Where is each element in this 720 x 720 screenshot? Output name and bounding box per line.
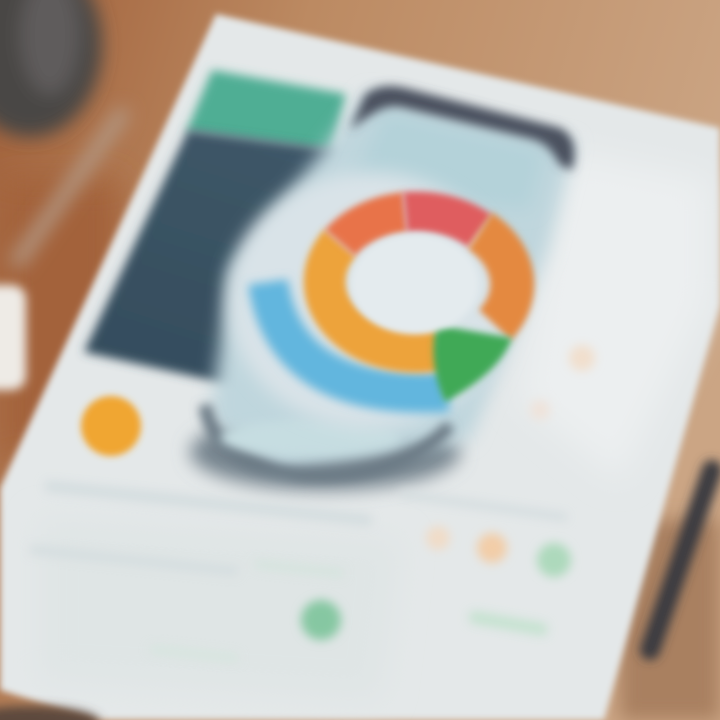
orange right arc xyxy=(480,231,512,325)
phone top bezel xyxy=(350,86,574,170)
green header block xyxy=(186,70,346,152)
dark shadow at bottom-left xyxy=(0,706,100,720)
outer blue arc xyxy=(268,282,448,393)
donut chart xyxy=(268,211,512,402)
red-orange arc xyxy=(340,212,405,243)
orange left and bottom arc xyxy=(325,243,442,352)
phone shadow base xyxy=(190,414,460,490)
red top arc xyxy=(405,211,480,231)
phone illustration xyxy=(190,86,575,490)
paper light sheen xyxy=(40,150,710,700)
faint text rows xyxy=(29,480,568,662)
phone lower bezel xyxy=(205,405,450,475)
row of small icons xyxy=(301,526,571,640)
dark mug in top-left corner xyxy=(0,0,102,137)
green segment xyxy=(433,325,512,402)
phone screen upper xyxy=(350,112,545,210)
pale round dial behind donut xyxy=(228,172,512,428)
dark blue panel xyxy=(84,130,340,400)
white object at left edge xyxy=(0,285,26,390)
phone lower screen xyxy=(220,420,400,456)
grey pen on the left xyxy=(15,110,125,265)
orange circle icon xyxy=(81,396,141,456)
small pale icons on the right xyxy=(530,345,595,420)
phone body xyxy=(210,92,575,470)
donut centre xyxy=(351,234,479,334)
dark pen on the right xyxy=(650,470,712,650)
